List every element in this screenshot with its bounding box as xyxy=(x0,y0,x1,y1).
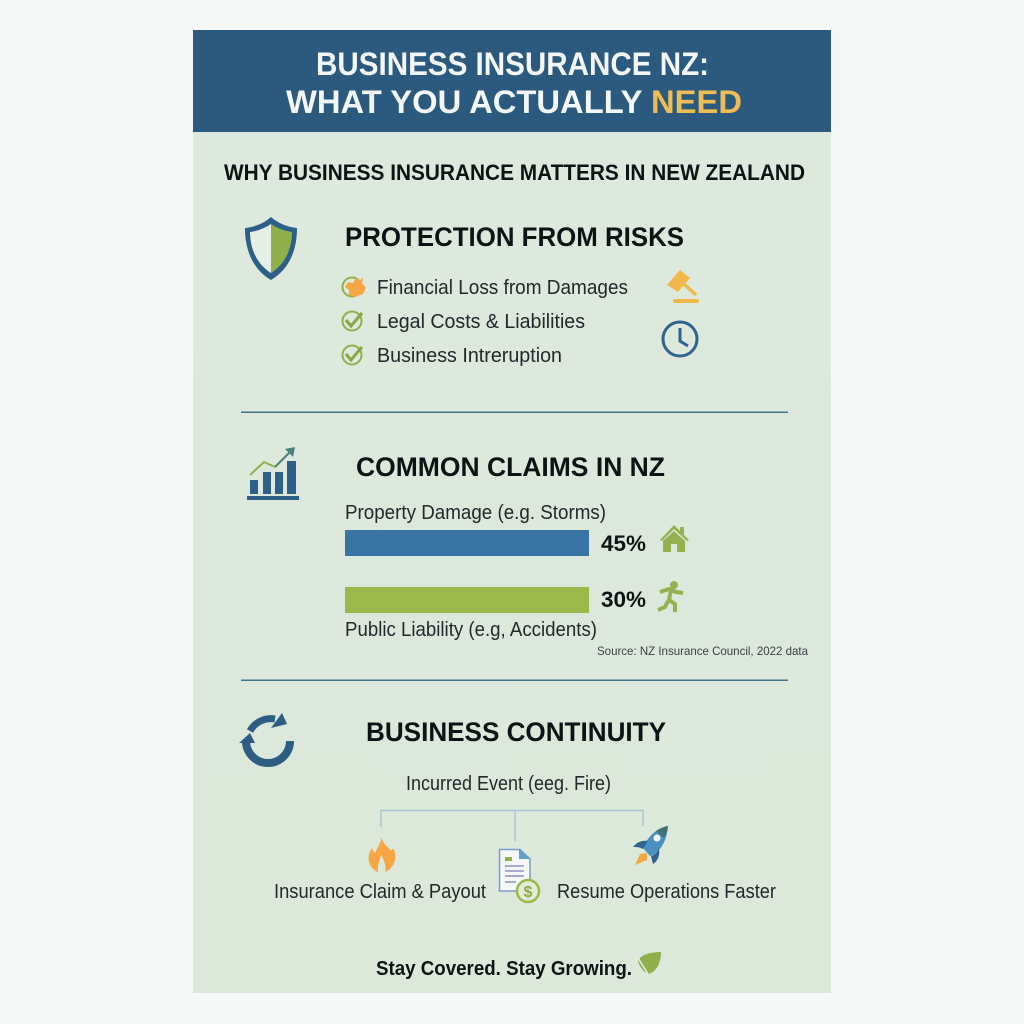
panel: background xyxy=(193,132,831,993)
value: 45% xyxy=(601,531,646,556)
header banner xyxy=(193,30,831,132)
panel: business continuity xyxy=(239,713,776,903)
icon: claim document with coin: $ xyxy=(524,884,533,901)
bar: property damage xyxy=(345,530,589,556)
icon: shield xyxy=(245,217,297,280)
footer tagline: Stay Covered. Stay Growing. xyxy=(376,958,632,980)
title line 2: WHAT YOU ACTUALLY NEED xyxy=(286,84,742,120)
list item: Business Intreruption xyxy=(377,345,562,367)
panel: protection from risks xyxy=(245,217,699,367)
list item: Financial Loss from Damages xyxy=(377,277,628,299)
bar: public liability xyxy=(345,587,589,613)
heading: COMMON CLAIMS IN NZ xyxy=(356,452,665,482)
icon: house xyxy=(660,525,689,552)
icon: leaf xyxy=(638,952,661,974)
icon: growth chart xyxy=(247,447,299,500)
bar label: Property Damage (e.g. Storms) xyxy=(345,502,606,524)
bar label: Public Liability (e.g, Accidents) xyxy=(345,619,597,641)
icon: gavel xyxy=(667,265,699,303)
divider xyxy=(241,412,788,413)
icon: claim document with coin xyxy=(500,849,539,902)
subheading: WHY BUSINESS INSURANCE MATTERS IN NEW ZEALAND xyxy=(224,160,805,185)
panel: common claims xyxy=(247,447,808,658)
icon: check xyxy=(342,312,362,330)
value: 30% xyxy=(601,587,646,612)
icon: flame xyxy=(369,837,395,872)
icon: runner xyxy=(658,581,683,612)
flow start label: Incurred Event (eeg. Fire) xyxy=(406,773,611,795)
flow label: Resume Operations Faster xyxy=(557,881,776,903)
flow label: Insurance Claim & Payout xyxy=(274,881,486,903)
icon: check xyxy=(342,346,362,364)
source note: Source: NZ Insurance Council, 2022 data xyxy=(597,644,808,658)
flow connector xyxy=(381,810,643,841)
icon: rocket xyxy=(633,826,668,865)
divider xyxy=(241,680,788,681)
title line 1: BUSINESS INSURANCE NZ: xyxy=(316,46,709,82)
icon: damage check xyxy=(342,278,366,297)
icon: cycle arrows xyxy=(239,713,290,763)
icon: clock xyxy=(663,322,697,356)
list item: Legal Costs & Liabilities xyxy=(377,311,585,333)
heading: PROTECTION FROM RISKS xyxy=(345,222,684,252)
heading: BUSINESS CONTINUITY xyxy=(366,717,666,747)
